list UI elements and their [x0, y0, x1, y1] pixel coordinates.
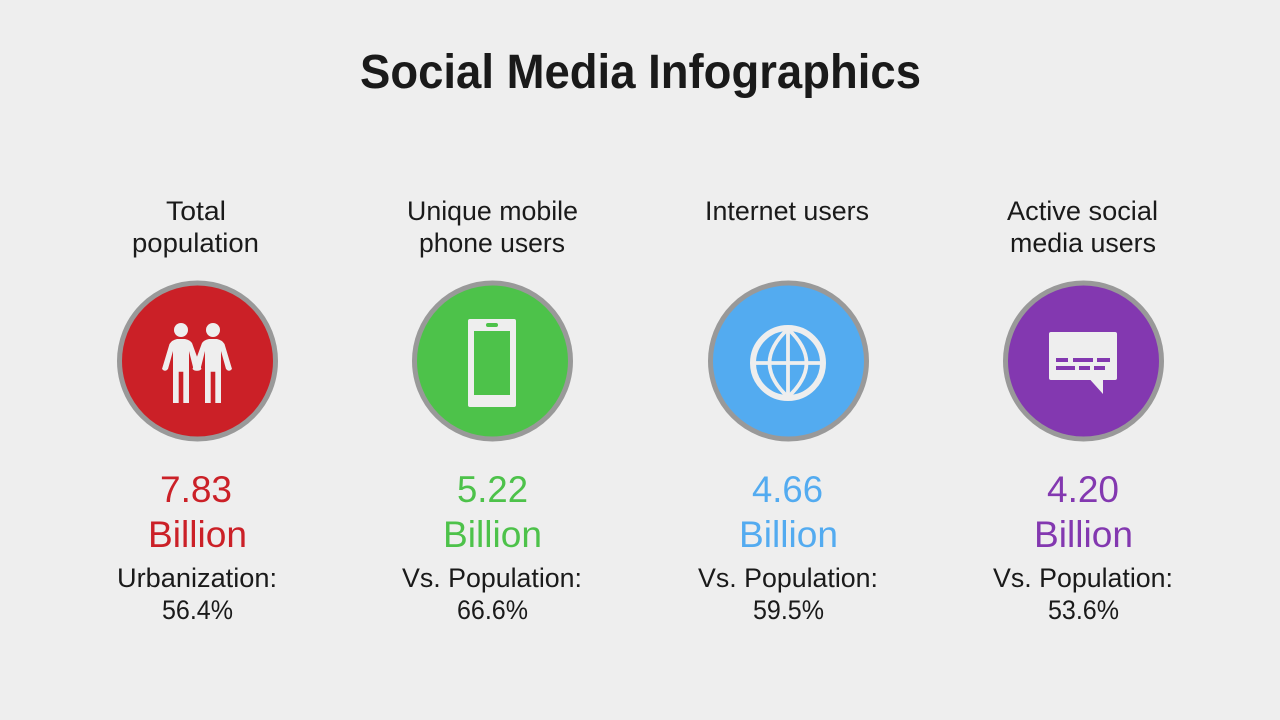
icon: chat bubble in purple circle	[1006, 283, 1162, 439]
heading: active social media users: media users	[1010, 228, 1156, 258]
heading: active social media users: Active social	[1007, 196, 1158, 226]
value: 4.66 Billion: Billion	[739, 514, 838, 555]
value: 5.22 Billion: Billion	[443, 514, 542, 555]
heading: unique mobile phone users	[407, 196, 578, 258]
value: 7.83 Billion: 7.83	[160, 469, 232, 510]
stat: vs population 66.6%: Vs. Population:	[402, 563, 582, 593]
icon: globe in blue circle	[710, 283, 866, 439]
stat: vs population 66.6%: 66.6%	[457, 595, 528, 625]
value: 4.20 Billion: 4.20	[1047, 469, 1119, 510]
value: 4.66 Billion	[739, 469, 838, 555]
value: 4.66 Billion: 4.66	[752, 469, 823, 510]
stat: vs population 59.5%: 59.5%	[753, 595, 824, 625]
heading: unique mobile phone users: phone users	[419, 228, 565, 258]
stat: urbanization: 56.4%	[162, 595, 233, 625]
value: 5.22 Billion	[443, 469, 542, 555]
value: 7.83 Billion	[148, 469, 247, 555]
stat: vs population 59.5%: Vs. Population:	[698, 563, 878, 593]
value: 7.83 Billion: Billion	[148, 514, 247, 555]
value: 5.22 Billion: 5.22	[457, 469, 528, 510]
stat: vs population 53.6%	[993, 563, 1173, 625]
panel: active social media users	[993, 196, 1173, 625]
stat: vs population 59.5%	[698, 563, 878, 625]
icon: phone in green circle	[414, 283, 570, 439]
icon: two people in red circle	[120, 283, 276, 439]
value: 4.20 Billion: Billion	[1034, 514, 1133, 555]
stat: vs population 53.6%: 53.6%	[1048, 595, 1119, 625]
panel: internet users	[698, 196, 878, 625]
heading: active social media users	[1007, 196, 1158, 258]
value: 4.20 Billion	[1034, 469, 1133, 555]
stat: urbanization: Urbanization:	[117, 563, 277, 593]
stat: vs population 53.6%: Vs. Population:	[993, 563, 1173, 593]
stat: vs population 66.6%	[402, 563, 582, 625]
title: Social Media Infographics	[360, 46, 921, 99]
panel: unique mobile phone users	[402, 196, 582, 625]
panel: total population	[117, 196, 277, 625]
heading: total population	[132, 196, 259, 258]
heading: total population: population	[132, 228, 259, 258]
heading: unique mobile phone users: Unique mobile	[407, 196, 578, 226]
heading: internet users: Internet users	[705, 196, 869, 226]
heading: total population: Total	[166, 196, 226, 226]
stat: urbanization	[117, 563, 277, 625]
